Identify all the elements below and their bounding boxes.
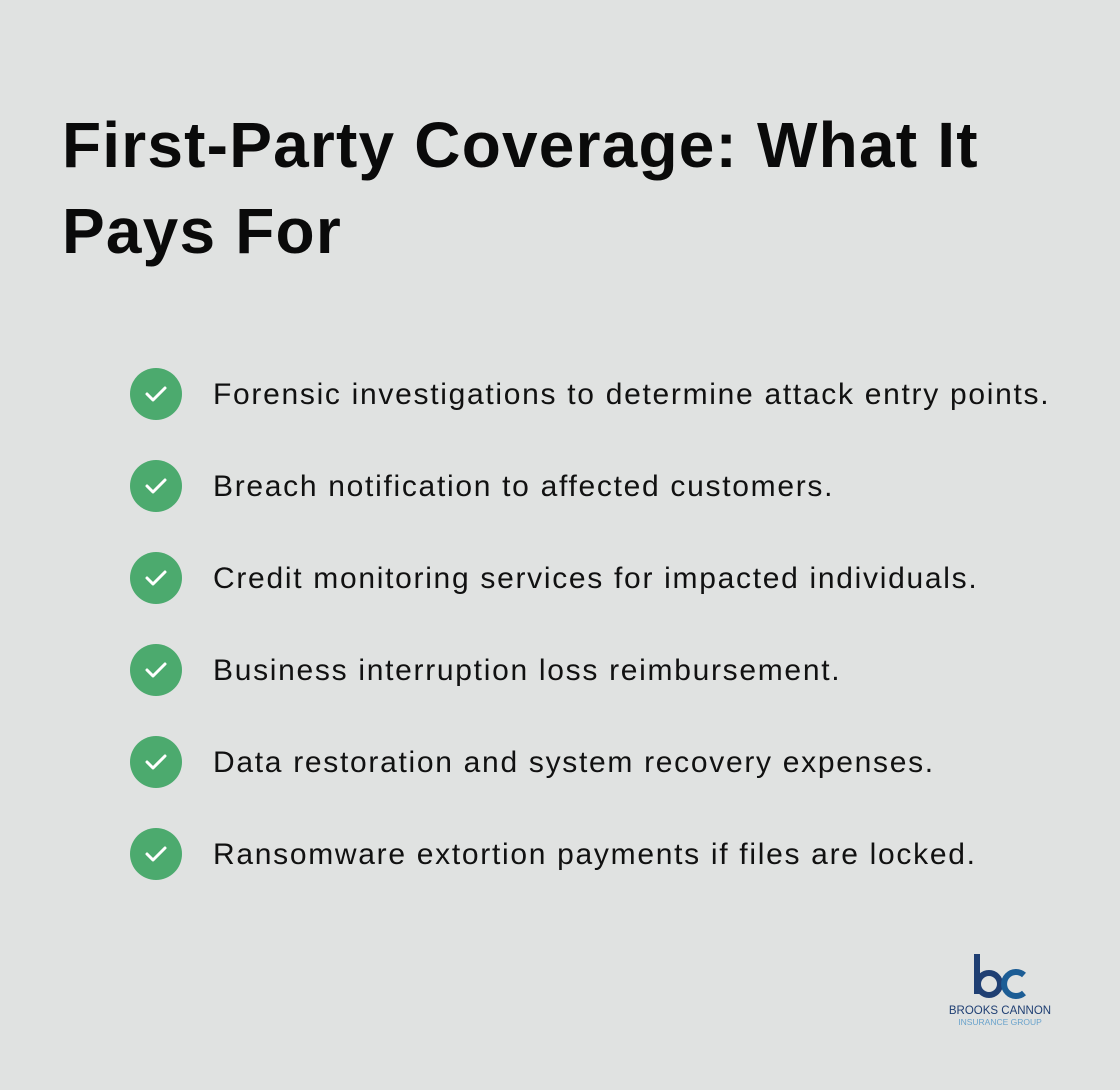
list item 3 xyxy=(130,552,978,604)
list item 5 xyxy=(130,736,935,788)
logo xyxy=(949,954,1051,1027)
list item 4: Business interruption loss reimbursement. xyxy=(213,654,841,687)
list item 4 xyxy=(130,644,841,696)
logo: BROOKS CANNON xyxy=(949,1005,1051,1017)
list item 2: Breach notification to affected customers. xyxy=(213,470,834,503)
title xyxy=(62,109,979,267)
logo: INSURANCE GROUP xyxy=(958,1017,1042,1027)
list item 6: Ransomware extortion payments if files are locked. xyxy=(213,838,977,871)
list item 1: Forensic investigations to determine attack entry points. xyxy=(213,378,1050,411)
list item 2 xyxy=(130,460,834,512)
title: Pays For xyxy=(62,195,342,267)
list item 5: Data restoration and system recovery expenses. xyxy=(213,746,935,779)
title: First-Party Coverage: What It xyxy=(62,109,979,181)
list item 3: Credit monitoring services for impacted individuals. xyxy=(213,562,978,595)
list item 1 xyxy=(130,368,1050,420)
list item 6 xyxy=(130,828,977,880)
